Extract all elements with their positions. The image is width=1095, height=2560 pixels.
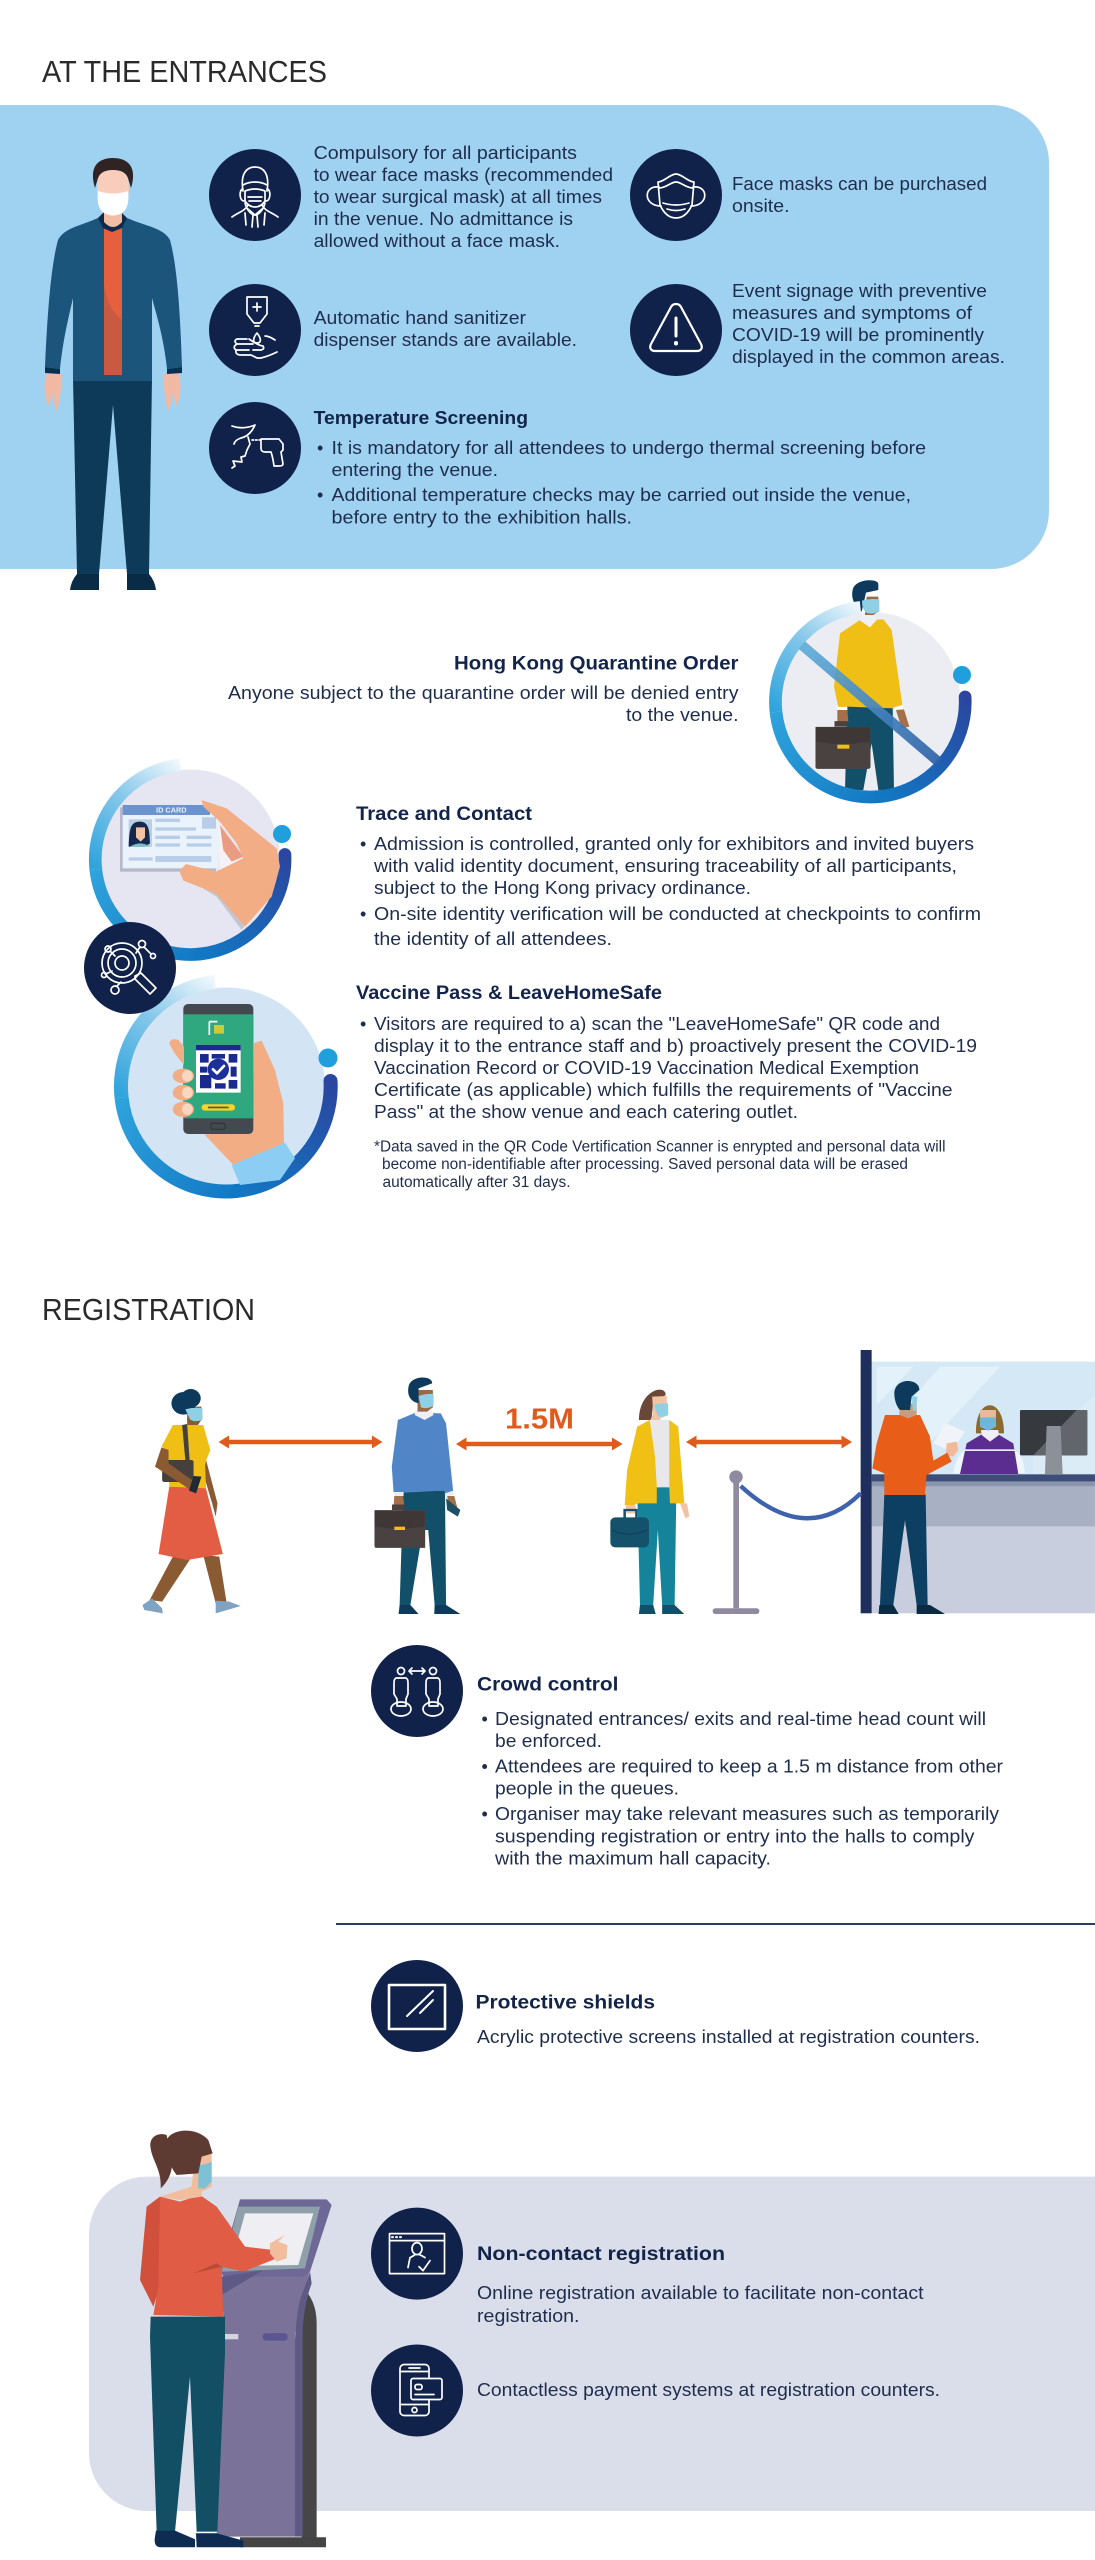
text: masks on sale [732, 174, 987, 216]
arrow: distance two [456, 1438, 623, 1450]
text: non-contact registration: Non-contact registration [477, 2243, 725, 2265]
text: trace and contact: Trace and Contact [356, 803, 533, 825]
illustration: woman at kiosk [140, 2131, 332, 2547]
text: crowd control: suspending registration or entry into the halls to comply [495, 1827, 974, 1847]
text: non-contact registration: registration. [477, 2306, 580, 2326]
text: event signage [732, 281, 1005, 367]
text: crowd control [477, 1674, 1003, 1869]
icon: hand sanitizer [209, 284, 301, 376]
text: trace and contact: • [360, 904, 366, 924]
illustration: phone qr code [121, 982, 338, 1192]
footnote: data privacy: automatically after 31 days. [382, 1174, 570, 1191]
text: vaccine pass: Vaccine Pass & LeaveHomeSafe [356, 982, 662, 1004]
text: temperature screening: • [317, 485, 323, 505]
text: crowd control: be enforced. [495, 1731, 602, 1751]
text: event signage: measures and symptoms of [732, 303, 973, 323]
text: event signage: displayed in the common areas. [732, 347, 1005, 367]
figure: woman with handbag [610, 1390, 689, 1614]
panel: non-contact registration [89, 2131, 1095, 2547]
illustration: queue with distancing [142, 1350, 1095, 1614]
text: face mask requirement: allowed without a face mask. [314, 231, 560, 251]
text: temperature screening: before entry to the exhibition halls. [332, 508, 632, 528]
text: temperature screening: It is mandatory for all attendees to undergo thermal screening before [332, 438, 926, 458]
text: crowd control: • [482, 1804, 488, 1824]
text: protective shields: Protective shields [476, 1992, 655, 2014]
footnote: data privacy: *Data saved in the QR Code Vertification Scanner is enrypted and personal data will [374, 1138, 946, 1156]
text: vaccine pass [356, 982, 977, 1122]
text: crowd control: with the maximum hall capacity. [494, 1849, 771, 1869]
icon: online registration [371, 2208, 463, 2300]
text: trace and contact: subject to the Hong Kong privacy ordinance. [374, 878, 751, 898]
text: crowd control: Designated entrances/ exits and real-time head count will [495, 1709, 986, 1729]
heading: registration: REGISTRATION [42, 1292, 255, 1327]
text: crowd control: • [482, 1756, 488, 1776]
text: protective shields [476, 1992, 980, 2047]
text: quarantine order: Hong Kong Quarantine Order [454, 653, 739, 675]
text: crowd control: Attendees are required to keep a 1.5 m distance from other [495, 1756, 1003, 1776]
icon: crowd distancing [371, 1645, 463, 1737]
text: vaccine pass: Visitors are required to a) scan the "LeaveHomeSafe" QR code and [374, 1014, 940, 1034]
illustration: registration counter [713, 1350, 1095, 1614]
arrow: distance three [686, 1436, 852, 1448]
text: face mask requirement: to wear face masks (recommended [314, 165, 613, 185]
text: non-contact registration [477, 2243, 924, 2326]
text: trace and contact: the identity of all attendees. [374, 929, 612, 949]
text: trace and contact: with valid identity document, ensuring traceability of all participants, [373, 856, 957, 876]
text: temperature screening: Temperature Screening [314, 408, 528, 428]
text: temperature screening: Additional temperature checks may be carried out inside the venue, [332, 485, 911, 505]
icon: protective shield [371, 1960, 463, 2052]
icon: warning sign [630, 284, 722, 376]
label: 1.5m distance: 1.5M [505, 1404, 574, 1436]
icon: person with mask [209, 149, 301, 241]
illustration: man wearing mask [45, 158, 182, 590]
text: crowd control: people in the queues. [495, 1778, 679, 1798]
icon: contact tracing search [84, 922, 176, 1014]
figure: man with briefcase [375, 1377, 460, 1614]
illustration: quarantine no entry [775, 580, 971, 797]
text: protective shields: Acrylic protective screens installed at registration counters. [477, 2027, 980, 2047]
illustration: id card in hand [95, 765, 291, 955]
text: event signage: COVID-19 will be prominently [732, 325, 984, 345]
text: crowd control: Crowd control [477, 1674, 618, 1696]
text: sanitizer dispensers: dispenser stands are available. [314, 330, 577, 350]
text: vaccine pass: display it to the entrance staff and b) proactively present the COVID-19 [374, 1036, 977, 1056]
text: temperature screening [314, 408, 926, 528]
text: temperature screening: • [317, 438, 323, 458]
text: trace and contact: • [360, 834, 366, 854]
text: quarantine order: to the venue. [626, 705, 738, 725]
text: crowd control: Organiser may take relevant measures such as temporarily [495, 1804, 999, 1824]
text: face mask requirement: to wear surgical mask) at all times [314, 187, 602, 207]
heading: at the entrances: AT THE ENTRANCES [42, 54, 327, 89]
arrow: distance one [218, 1436, 382, 1448]
text: face mask requirement: in the venue. No admittance is [314, 209, 573, 229]
text: contactless payment: Contactless payment systems at registration counters. [477, 2380, 940, 2400]
text: non-contact registration: Online registration available to facilitate non-contact [477, 2283, 924, 2303]
text: vaccine pass: • [360, 1014, 366, 1034]
text: quarantine order: Anyone subject to the quarantine order will be denied entry [228, 683, 738, 703]
text: vaccine pass: Pass" at the show venue and each catering outlet. [374, 1102, 798, 1122]
text: face mask requirement: Compulsory for all participants [314, 143, 577, 163]
mark: diagonal prohibition bar [802, 645, 938, 762]
text: crowd control: • [482, 1709, 488, 1729]
text: vaccine pass: Vaccination Record or COVID-19 Vaccination Medical Exemption [374, 1058, 919, 1078]
text: id card label: ID CARD [156, 806, 187, 815]
text: face mask requirement [314, 143, 613, 251]
icon: thermal screening [209, 402, 301, 494]
text: trace and contact: On-site identity verification will be conducted at checkpoints to confirm [374, 904, 981, 924]
text: sanitizer dispensers [314, 308, 577, 350]
figure: woman walking [142, 1389, 241, 1613]
text: masks on sale: Face masks can be purchased [732, 174, 987, 194]
footnote: data privacy [374, 1138, 946, 1191]
text: trace and contact [356, 803, 981, 949]
text: event signage: Event signage with preventive [732, 281, 987, 301]
text: quarantine order [228, 653, 739, 725]
text: temperature screening: entering the venue. [332, 460, 498, 480]
panel: entrance measures [0, 105, 1049, 590]
footnote: data privacy: become non-identifiable after processing. Saved personal data will be erased [382, 1156, 908, 1173]
icon: face mask [630, 149, 722, 241]
text: masks on sale: onsite. [732, 196, 790, 216]
text: sanitizer dispensers: Automatic hand sanitizer [314, 308, 526, 328]
text: vaccine pass: Certificate (as applicable) which fulfills the requirements of "Vaccine [374, 1080, 952, 1100]
icon: contactless payment [371, 2344, 463, 2436]
text: trace and contact: Admission is controlled, granted only for exhibitors and invited buyers [374, 834, 974, 854]
